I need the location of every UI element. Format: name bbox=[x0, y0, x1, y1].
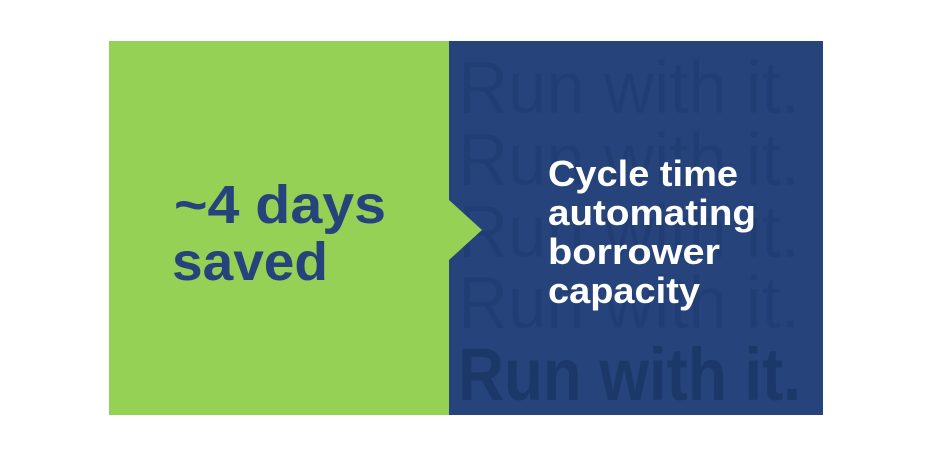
text block: description bbox=[548, 153, 756, 311]
watermark: repeated slogan: Run with it. bbox=[458, 118, 800, 201]
text block: description: borrower bbox=[548, 231, 720, 272]
text block: description: capacity bbox=[548, 270, 700, 311]
watermark: repeated slogan bbox=[458, 46, 800, 344]
watermark: repeated slogan: Run with it. bbox=[458, 261, 800, 344]
watermark: repeated slogan: Run with it. bbox=[458, 46, 800, 129]
panel: green stat bbox=[109, 41, 449, 415]
watermark: repeated slogan: Run with it. bbox=[458, 190, 800, 273]
heading: stat: ~4 days bbox=[174, 175, 386, 235]
text block: description: Cycle time bbox=[548, 153, 738, 194]
heading: stat: saved bbox=[172, 232, 328, 292]
text block: description: automating bbox=[548, 192, 756, 233]
watermark: bold slogan: Run with it. bbox=[458, 333, 801, 416]
panel: blue description bbox=[449, 41, 823, 416]
arrow: green pointer bbox=[449, 200, 482, 260]
heading: stat bbox=[172, 175, 386, 292]
